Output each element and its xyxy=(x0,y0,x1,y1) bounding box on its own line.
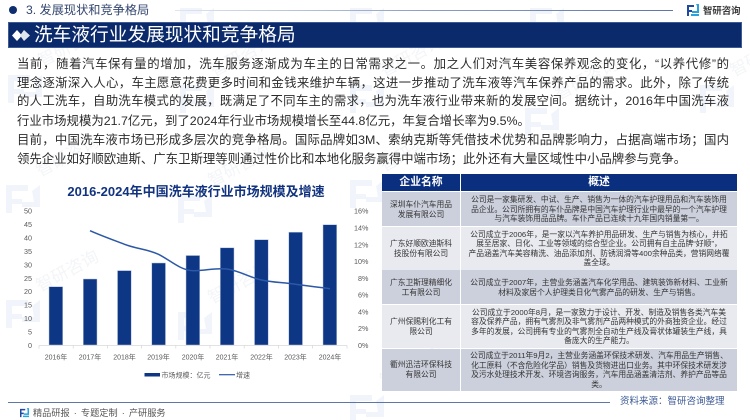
right axis: 4% xyxy=(358,308,369,316)
row 2 description: 公司成立于2006年，是一家以汽车养护用品研发、生产与销售为核心，并拓 xyxy=(470,230,728,239)
left axis: 15 xyxy=(24,300,32,310)
row 3 description: 材料及家居个人护理类日化气雾产品的研发、生产与销售。 xyxy=(498,288,700,296)
left axis xyxy=(24,206,32,350)
category labels xyxy=(45,352,341,362)
right axis xyxy=(354,206,369,350)
paragraph line 5: 目前，中国洗车液市场已形成多层次的竞争格局。国际品牌如3M、索纳克斯等凭借技术优势和品牌影响力，占据高端市场；国内 xyxy=(17,133,729,147)
footer slogan xyxy=(20,408,166,418)
left axis: 20 xyxy=(24,287,32,296)
row 4 description: 备庞大的生产能力。 xyxy=(564,336,634,345)
category labels: 2024年 xyxy=(319,352,341,362)
row 2 company: 技股份有限公司 xyxy=(394,249,448,258)
growth line xyxy=(90,231,330,289)
left axis: 45 xyxy=(24,220,32,229)
legend: 市场规模：亿元 xyxy=(162,370,210,380)
category labels: 2017年 xyxy=(79,352,101,362)
row 3 company: 工有限公司 xyxy=(402,288,440,296)
section heading text: 3. 发展现状和竞争格局 xyxy=(26,3,149,17)
slogan text: 精品研报 · 专题定制 · 产研服务 xyxy=(33,408,166,418)
category labels: 2019年 xyxy=(147,352,170,362)
chart title: 2016-2024年中国洗车液行业市场规模及增速 xyxy=(67,184,325,199)
row 2 description: 产品涵盖汽车美容精洗、油品添加剂、防锈润滑等400余种品类，营销网络覆 xyxy=(469,249,729,258)
row 5 description: 类。 xyxy=(591,380,607,389)
row 3 description: 公司成立于2007年，主营业务涵盖汽车化学用品、建筑装饰新材料、工业新 xyxy=(470,278,728,287)
left axis: 10 xyxy=(24,314,32,323)
row 4 description xyxy=(461,305,737,348)
left axis: 30 xyxy=(24,260,32,270)
right axis: 8% xyxy=(358,274,369,283)
table header: overview: 概述 xyxy=(588,176,610,188)
row 4 description: 公司成立于2000年8月，是一家致力于设计、开发、制造及销售各类汽车美 xyxy=(472,308,726,317)
left axis: 0 xyxy=(28,341,32,350)
right axis: 10% xyxy=(354,257,369,266)
table header: company name xyxy=(382,174,460,191)
legend xyxy=(144,370,250,380)
category labels: 2020年 xyxy=(182,352,204,362)
row 5 description xyxy=(461,348,737,391)
left axis: 40 xyxy=(24,234,32,242)
x axis xyxy=(39,346,347,348)
category labels: 2021年 xyxy=(216,352,238,362)
row 1 company: 发展有限公司 xyxy=(398,210,444,218)
right axis: 6% xyxy=(358,290,369,300)
row 4 description: 容及保养产品，拥有气雾剂及非气雾剂产品两种模式的外商独资企业。经过 xyxy=(471,317,727,326)
row 1 company: 深圳车仆汽车用品 xyxy=(390,200,452,208)
row 1 description: 与汽车装饰用品品牌。车仆产品已连续十九年国内销量第一。 xyxy=(494,214,704,223)
row 2 description: 盖全球。 xyxy=(583,258,614,267)
row 1 description: 品企业。公司所拥有的车仆品牌是中国汽车护理行业中最早的一个汽车护理 xyxy=(471,205,727,214)
row 1 company xyxy=(382,192,460,226)
paragraph line 4: 行业市场规模为21.7亿元，到了2024年行业市场规模增长至44.8亿元，年复合增长率为9.5%。 xyxy=(17,114,530,128)
left axis: 25 xyxy=(24,274,32,283)
logo: 智研咨询 xyxy=(687,4,741,16)
row 5 company: 衢州迅洁环保科技 xyxy=(390,360,452,369)
row 3 company xyxy=(382,270,460,304)
logo icon xyxy=(687,4,699,16)
right axis: 2% xyxy=(358,324,369,333)
body text xyxy=(17,57,729,166)
row 4 company: 广州保赐利化工有 xyxy=(390,317,452,326)
source note: 资料来源：智研咨询整理 xyxy=(620,396,725,407)
right axis: 0% xyxy=(358,341,369,350)
right axis: 14% xyxy=(354,224,369,232)
row 2 description xyxy=(461,227,737,270)
row 1 description xyxy=(461,192,737,226)
table: major companies xyxy=(382,174,737,391)
category labels: 2016年 xyxy=(45,352,67,362)
row 4 company: 限公司 xyxy=(409,327,433,336)
paragraph line 2: 理念逐渐深入人心，车主愿意花费更多时间和金钱来维护车辆，这进一步推动了洗车液等汽车保养产品的需求。此外，除了传统 xyxy=(17,76,729,90)
row 2 company xyxy=(382,227,460,270)
bars: market size xyxy=(49,225,337,345)
row 2 description: 展至居家、日化、工业等领域的综合型企业。公司拥有自主品牌“好顺”， xyxy=(476,239,722,248)
category labels: 2023年 xyxy=(284,352,307,362)
left axis: 50 xyxy=(24,206,32,216)
left axis: 35 xyxy=(24,247,32,256)
row 5 description: 化工原料（不含危险化学品）销售及货物进出口业务。其中环保技术研发涉 xyxy=(471,361,727,370)
row 5 company xyxy=(382,348,460,391)
icon: double diamond xyxy=(12,30,30,41)
category labels: 2022年 xyxy=(250,352,273,362)
bullet xyxy=(9,6,17,14)
row 5 description: 及污水处理技术开发、环境咨询服务，汽车用品涵盖清洁剂、养护产品等品 xyxy=(471,370,727,379)
row 1 description: 公司是一家集研发、中试、生产、销售为一体的汽车护理用品和汽车装饰用 xyxy=(471,195,727,204)
title: 洗车液行业发展现状和竞争格局 xyxy=(34,24,296,45)
row 2 company: 广东好顺欧迪斯科 xyxy=(390,239,452,248)
chart: market size and growth xyxy=(24,184,369,380)
row 4 description: 多年的发展，公司拥有专业的气雾剂全自动生产线及膏状体罐装生产线，具 xyxy=(471,327,727,336)
row 5 description: 公司成立于2011年9月2，主营业务涵盖环保技术研发、汽车用品生产销售、 xyxy=(470,351,728,360)
row 3 company: 广东卫斯理精细化 xyxy=(390,278,452,286)
right axis: 12% xyxy=(354,240,369,249)
logo text: 智研咨询 xyxy=(703,5,741,16)
slogan icon xyxy=(20,408,29,418)
row 3 description xyxy=(461,270,737,304)
paragraph line 3: 的人工洗车，自助洗车模式的发展，既满足了不同车主的需求，也为洗车液行业带来新的发展空间。据统计，2016年中国洗车液 xyxy=(17,94,729,108)
table header: company name: 企业名称 xyxy=(399,176,443,188)
table header: overview xyxy=(461,174,737,191)
paragraph line 1: 当前，随着汽车保有量的增加，洗车服务逐渐成为车主的日常需求之一。加之人们对汽车美容保养观念的变化，“以养代修”的 xyxy=(17,57,729,71)
footer rule xyxy=(8,402,610,403)
category labels: 2018年 xyxy=(113,352,136,362)
right axis: 16% xyxy=(354,206,369,216)
row 4 company xyxy=(382,305,460,348)
title banner xyxy=(8,22,742,48)
row 5 company: 有限公司 xyxy=(405,370,436,379)
paragraph line 6: 领先企业如好顺欧迪斯、广东卫斯理等则通过性价比和本地化服务赢得中端市场；此外还有大量区域性中小品牌参与竞争。 xyxy=(17,152,686,166)
left axis: 5 xyxy=(28,328,32,336)
legend: 增速 xyxy=(236,370,250,380)
header rule xyxy=(175,10,673,11)
section heading xyxy=(9,3,149,17)
